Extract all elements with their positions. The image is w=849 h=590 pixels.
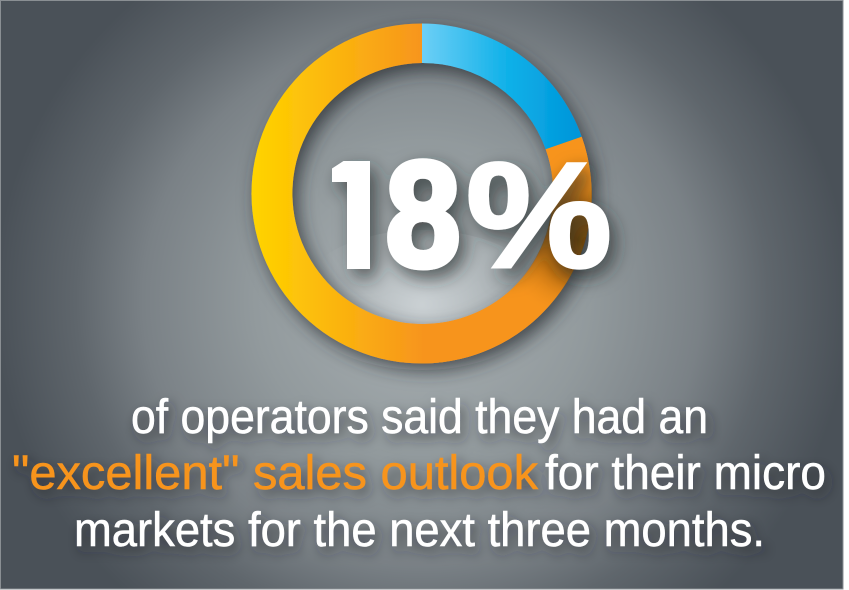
caption line 2: "excellent" sales outlook bbox=[12, 447, 539, 500]
donut chart bbox=[251, 23, 658, 363]
light spot in ring centre bbox=[297, 230, 547, 370]
caption line 1: of operators said they had an bbox=[131, 391, 708, 444]
caption line 3: markets for the next three months. bbox=[74, 504, 765, 557]
big number: 1 bbox=[312, 130, 395, 298]
donut: segments bbox=[251, 23, 591, 363]
big number: % bbox=[466, 131, 612, 299]
donut: percent shadow burn bbox=[516, 164, 592, 309]
caption line 2: for their micro bbox=[545, 447, 826, 500]
caption line 2 bbox=[12, 447, 826, 500]
big number bbox=[328, 154, 627, 292]
big number: 8 bbox=[386, 130, 460, 298]
caption text bbox=[12, 391, 826, 557]
